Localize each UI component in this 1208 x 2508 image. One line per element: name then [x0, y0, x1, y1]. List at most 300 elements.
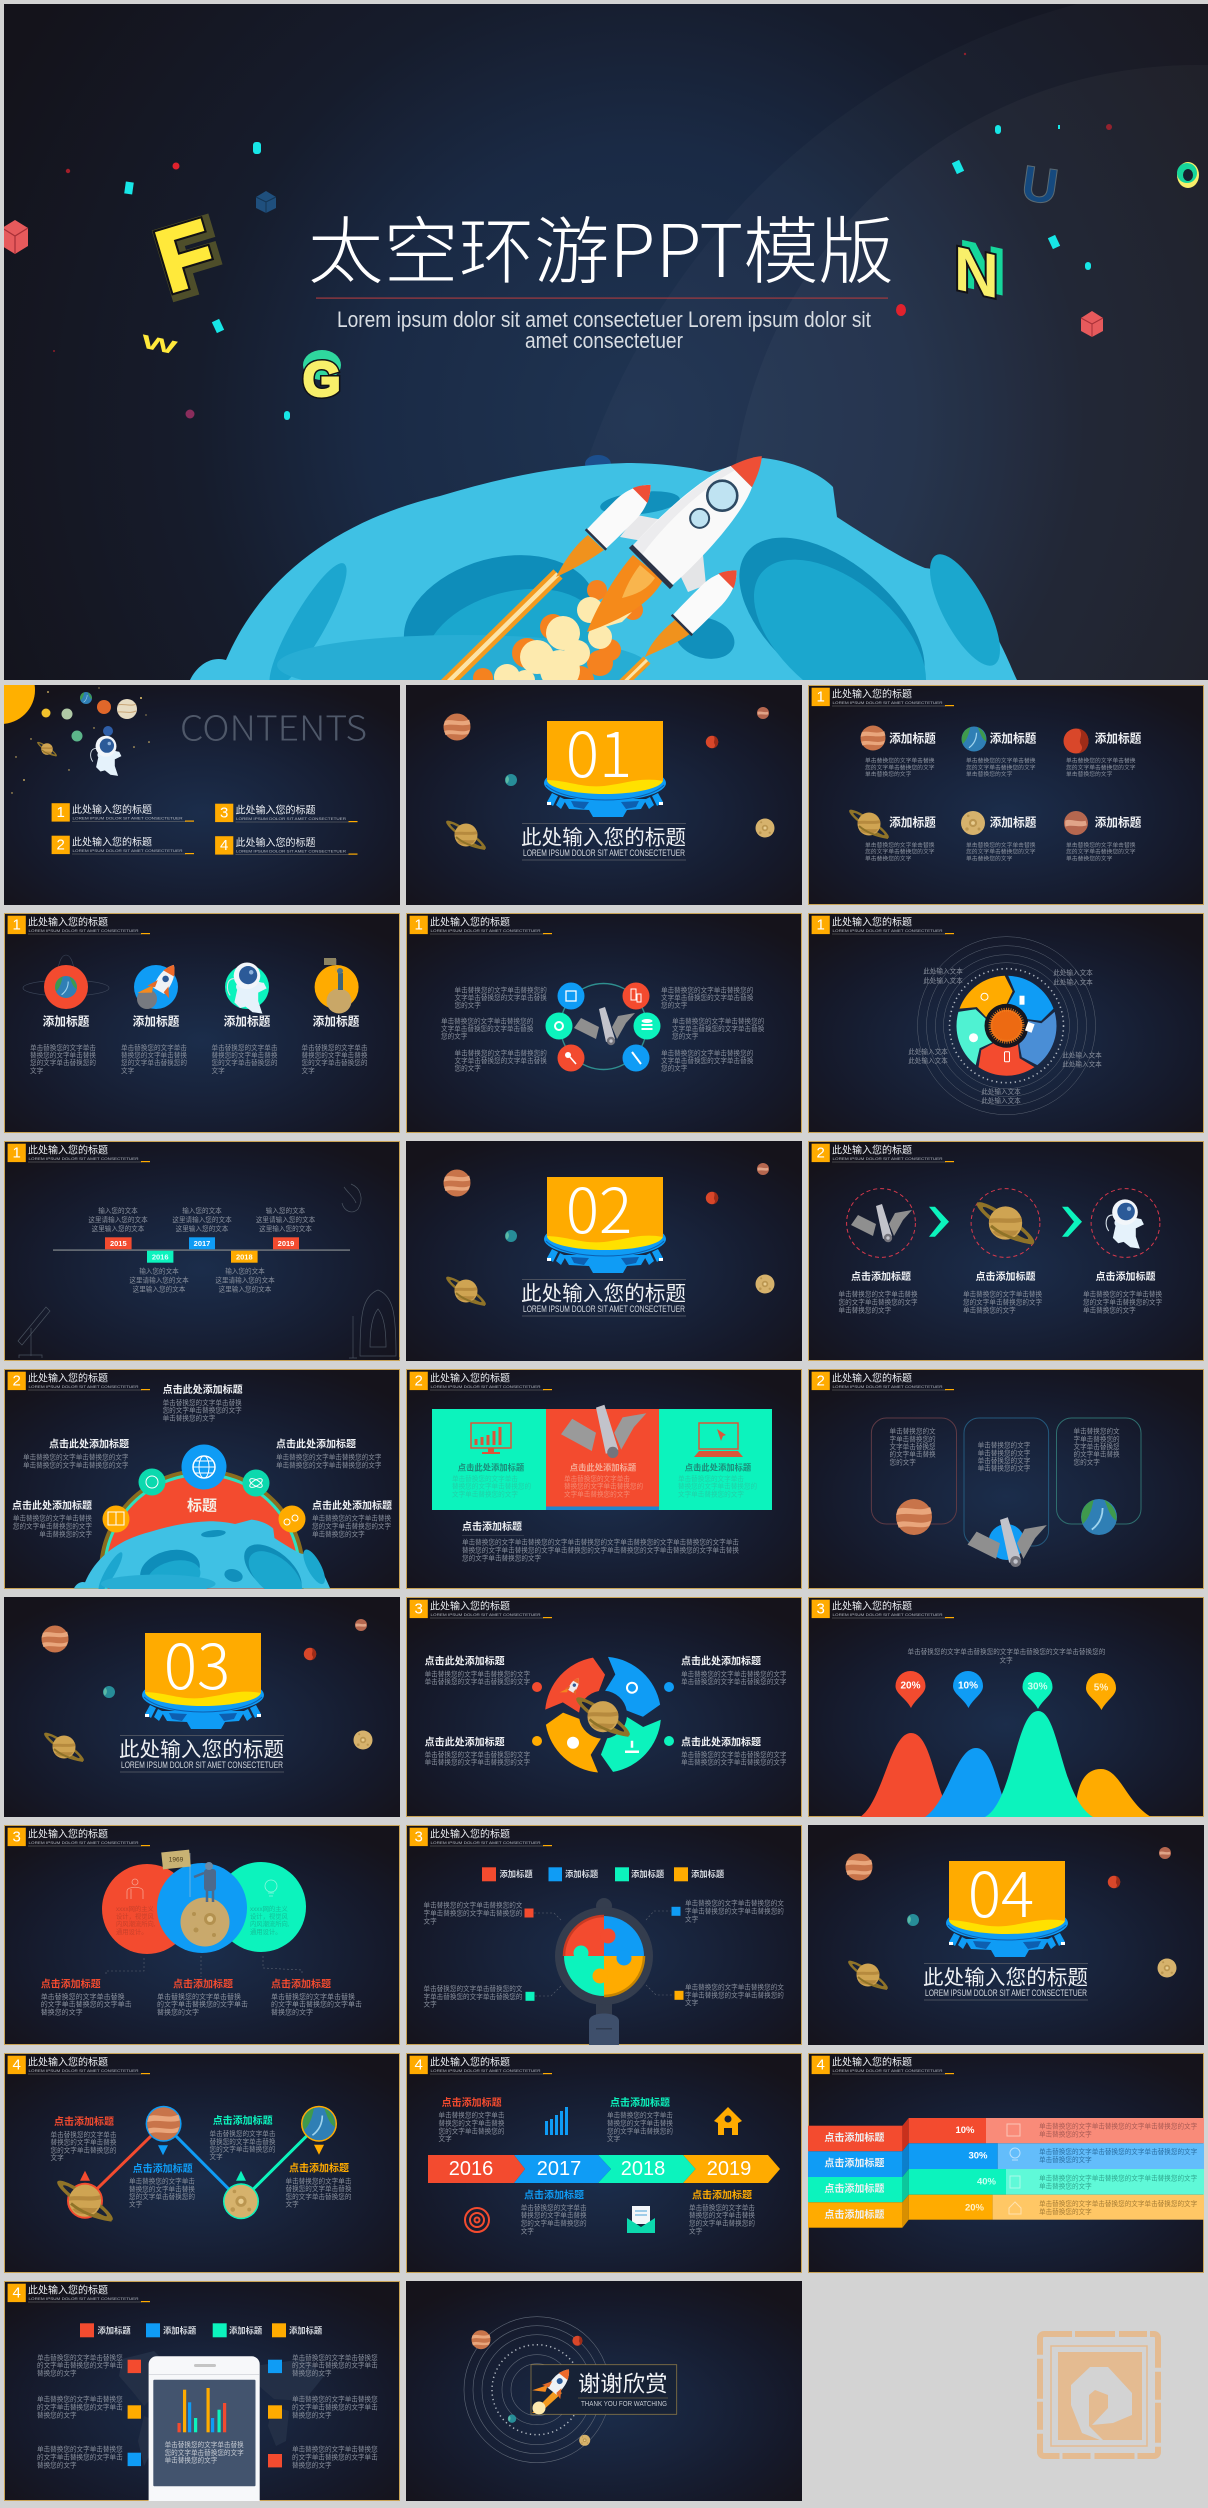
circle titles — [43, 1014, 360, 1028]
phone: 单击替换您的文字单击替换 — [165, 2440, 244, 2448]
venn circles: 通用设计。 — [116, 1926, 147, 1936]
panel: year arrows — [406, 2054, 802, 2272]
timeline bar with years — [53, 1237, 350, 1263]
header: 此处输入您的标题 — [832, 916, 912, 928]
contents item 3: LOREM IPSUM DOLOR SIT AMET CONSECTETUER — [236, 817, 346, 821]
header: LOREM IPSUM DOLOR SIT AMET CONSECTETUER — [430, 1841, 541, 1845]
header — [8, 1372, 150, 1390]
icon: letter F: F — [150, 204, 229, 313]
planet descriptions: 单击替换您的文字 — [966, 770, 1013, 778]
venn circles: 设计，视觉风 — [250, 1911, 288, 1920]
planet titles — [889, 732, 1142, 830]
venn circles: 通用设计。 — [250, 1926, 281, 1936]
icon: letter U: U — [1018, 155, 1062, 215]
text lower left: 单击替换您的文字单击替换 — [13, 1513, 92, 1522]
bottom text block: 替换您的文字单击替换您的文字单击替换您的文字单击替换您的文字单击替换您的文字单击替换 — [462, 1545, 739, 1554]
card: chart: 点击此处添加标题 — [458, 1463, 525, 1473]
text lower left: 点击此处添加标题 — [12, 1499, 92, 1512]
tab 2: 单击替换您的文字 — [978, 1440, 1031, 1449]
contents item 1: 1 — [57, 804, 65, 821]
panel: contents slide — [4, 685, 400, 905]
text column 1: 替换您的文字 — [41, 2007, 83, 2016]
legend: 添加标题 — [631, 1869, 665, 1879]
timeline text above: 这里输入您的文本 — [176, 1224, 229, 1232]
contents item 3: 3 — [220, 804, 228, 822]
tab 1 — [871, 1418, 956, 1535]
planet titles: 添加标题 — [990, 732, 1037, 746]
text column 2: 的文字单击替换您的文字单击 — [157, 1999, 248, 2008]
chart intro text: 单击替换您的文字单击替换您的文字单击替换您的文字单击替换您的 — [908, 1646, 1106, 1656]
header: 4 — [817, 2056, 825, 2074]
circle descriptions: 单击替换您的文字单击 — [212, 1042, 278, 1052]
header: 1 — [817, 688, 825, 706]
hub diagram — [546, 982, 660, 1072]
arrow band with years: 2019 — [707, 2158, 751, 2180]
icon: letter F: F — [146, 202, 225, 311]
text lower left: 单击替换您的文字 — [39, 1529, 92, 1538]
section heading: LOREM IPSUM DOLOR SIT AMET CONSECTETUER — [121, 1760, 283, 1770]
header — [410, 1372, 552, 1390]
tab 1: 您的文字 — [890, 1457, 916, 1466]
card: satellite: 替换您的文字单击替换您的 — [564, 1481, 644, 1490]
text column 3: 点击添加标题 — [271, 1978, 331, 1990]
note teal — [210, 2114, 276, 2160]
phone: 您的文字单击替换您的文字 — [165, 2448, 244, 2456]
text top: 单击替换您的文字单击替换 — [163, 1398, 242, 1406]
planet descriptions: 单击替换您的文字单击替换 — [865, 841, 935, 849]
note red: 替换您的文字单击替换 — [438, 2118, 505, 2127]
hub text right: 文字单击替换您的文字单击替换 — [672, 1024, 765, 1032]
circle icon: astronaut — [225, 962, 269, 1014]
timeline text above: 这里请输入您的文本 — [256, 1214, 316, 1224]
text lower right — [681, 1736, 787, 1766]
icon: letter N — [956, 240, 1003, 300]
text upper left — [425, 1654, 531, 1686]
circle titles: 添加标题 — [224, 1014, 271, 1028]
icon: house — [714, 2107, 742, 2135]
header: LOREM IPSUM DOLOR SIT AMET CONSECTETUER — [430, 2069, 541, 2073]
header: 此处输入您的标题 — [28, 2056, 108, 2068]
timeline bar with years: 2016 — [152, 1252, 169, 1261]
step descriptions: 单击替换您的文字 — [963, 1305, 1016, 1314]
header: 3 — [817, 1600, 825, 1618]
illustration: sun — [4, 685, 35, 724]
arrow band with years — [428, 2155, 780, 2183]
watermark stamp — [1040, 2334, 1158, 2456]
tab 3 — [1056, 1418, 1141, 1535]
thank-you box: THANK YOU FOR WATCHING — [581, 2399, 667, 2408]
icon: letter G: G — [303, 354, 340, 406]
dashed circles with art — [847, 1189, 1160, 1257]
step descriptions: 单击替换您的文字单击替换 — [838, 1289, 918, 1298]
venn circles: xxxx网的主义 — [250, 1904, 288, 1912]
text upper right: 单击替换您的文字单击替换您的文字 — [681, 1676, 787, 1686]
left notes: 的文字单击替换您的文字单击 — [37, 2452, 123, 2461]
planet descriptions: 单击替换您的文字单击替换 — [966, 841, 1036, 849]
venn circles: 内风潮流所向, — [250, 1918, 290, 1928]
bar 10%: 10% — [955, 2125, 975, 2136]
panel: orbit wheel — [808, 914, 1204, 1132]
left tabs: 点击添加标题 — [824, 2208, 884, 2221]
circle descriptions: 文字 — [30, 1066, 44, 1074]
tab 3: 您的文字 — [1074, 1457, 1100, 1466]
panel: six planets — [808, 686, 1204, 904]
note blue: 点击添加标题 — [524, 2188, 584, 2202]
contents item 2 — [52, 836, 194, 854]
text upper right: 点击此处添加标题 — [276, 1438, 356, 1450]
left notes: 替换您的文字 — [37, 2410, 77, 2419]
note red — [50, 2115, 117, 2162]
panel: mountain chart — [808, 1598, 1204, 1817]
text column 3 — [271, 1978, 362, 2016]
icon: letter W: W — [139, 331, 179, 359]
note red: 点击添加标题 — [54, 2115, 114, 2128]
panel: timeline — [4, 1142, 404, 1360]
bar 40%: 单击替换您的文字单击替换您的文字单击替换您的文字 — [1039, 2173, 1198, 2182]
step titles — [851, 1270, 1156, 1283]
timeline text below: 这里输入您的文本 — [133, 1284, 186, 1293]
header: LOREM IPSUM DOLOR SIT AMET CONSECTETUER — [28, 929, 139, 933]
planet titles: 添加标题 — [1095, 732, 1142, 746]
header: LOREM IPSUM DOLOR SIT AMET CONSECTETUER — [28, 1157, 139, 1161]
note upper right: 单击替换您的文字单击替换您的文 — [685, 1898, 784, 1907]
header: 此处输入您的标题 — [430, 1600, 510, 1612]
card: chart: 文字单击替换您的文字 — [452, 1489, 518, 1498]
bar 10% — [909, 2118, 1204, 2143]
note blue — [521, 2188, 587, 2235]
header — [8, 1828, 150, 1846]
icon: letter F: F — [146, 202, 225, 311]
note red: 您的文字单击替换您的 — [438, 2126, 505, 2135]
circle descriptions: 文字 — [302, 1066, 315, 1074]
section artwork — [443, 1163, 774, 1309]
timeline bar with years: 2017 — [194, 1239, 210, 1248]
panel: rounded tabs with planets — [808, 1370, 1204, 1588]
header: 此处输入您的标题 — [28, 2284, 108, 2296]
section artwork — [443, 707, 774, 853]
bar 30%: 30% — [968, 2150, 988, 2162]
title: 太空环游PPT模版 — [308, 193, 894, 299]
header: 1 — [415, 916, 423, 934]
note teal: 点击添加标题 — [213, 2114, 273, 2127]
header: 此处输入您的标题 — [832, 1372, 912, 1384]
section number: 01 — [566, 705, 632, 795]
note orange: 替换您的文字单击替换 — [689, 2210, 755, 2219]
circle titles: 添加标题 — [133, 1014, 180, 1028]
panel: thank you slide — [406, 2281, 802, 2501]
bar 40% — [909, 2169, 1204, 2195]
right notes: 替换您的文字 — [292, 2368, 332, 2377]
text lower left: 单击替换您的文字单击替换您的文字 — [425, 1750, 531, 1758]
header: LOREM IPSUM DOLOR SIT AMET CONSECTETUER — [28, 2069, 139, 2073]
text lower left: 点击此处添加标题 — [425, 1736, 505, 1748]
timeline text below: 这里请输入您的文本 — [215, 1275, 275, 1284]
icon: red cube left — [2, 220, 28, 254]
panel: phone chart — [4, 2282, 400, 2501]
section heading — [521, 1280, 686, 1316]
note teal: 单击替换您的文字单击 — [607, 2110, 673, 2119]
note orange: 替换您的文字单击替换 — [286, 2184, 352, 2192]
hub text left: 文字单击替换您的文字单击替换 — [454, 1056, 547, 1064]
timeline text above: 这里输入您的文本 — [259, 1224, 312, 1232]
circle descriptions: 单击替换您的文字单击 — [302, 1042, 368, 1052]
bar 30%: 单击替换您的文字单击替换您的文字单击替换您的文字 — [1039, 2146, 1198, 2156]
pin 10%: 10% — [958, 1680, 978, 1692]
icon: red cube right — [1081, 311, 1103, 337]
legend: 添加标题 — [289, 2325, 323, 2335]
header: 此处输入您的标题 — [28, 916, 108, 928]
tab 1: 字单击替换您的 — [890, 1434, 936, 1443]
text upper left — [23, 1438, 129, 1469]
header: 此处输入您的标题 — [430, 1828, 510, 1840]
text lower right: 单击替换您的文字单击替换您的文字 — [681, 1750, 787, 1758]
circle titles: 添加标题 — [43, 1014, 90, 1028]
tab 2: 单击替换您的文字 — [978, 1456, 1031, 1464]
right notes: 替换您的文字 — [292, 2410, 332, 2419]
right notes: 替换您的文字 — [292, 2460, 332, 2469]
pin 20% — [896, 1671, 926, 1708]
tab 3: 的文字单击替换 — [1074, 1449, 1120, 1458]
note blue: 单击替换您的文字单击 — [129, 2176, 195, 2185]
orbit rings and planets — [464, 2317, 610, 2463]
header: 此处输入您的标题 — [28, 1372, 108, 1384]
hub text right: 文字单击替换您的文字单击替换 — [661, 1056, 754, 1064]
icon: letter N: N — [960, 229, 1005, 308]
header — [812, 1144, 954, 1162]
contents item 3 — [215, 804, 358, 822]
left notes: 替换您的文字 — [37, 2460, 77, 2469]
orbit labels — [908, 966, 1102, 1104]
planet titles: 添加标题 — [889, 816, 936, 830]
header: 3 — [415, 1828, 423, 1846]
hub text right: 文字单击替换您的文字单击替换 — [661, 992, 754, 1002]
legend — [80, 2323, 323, 2337]
planet descriptions: 您的文字单击替换您的文字 — [1066, 763, 1136, 771]
circle titles: 添加标题 — [313, 1014, 360, 1028]
pin 30%: 30% — [1027, 1682, 1048, 1692]
timeline bar with years: 2019 — [278, 1239, 294, 1248]
header — [410, 916, 552, 934]
circle icon: rocket — [134, 956, 185, 1009]
mountain chart — [860, 1711, 1151, 1817]
note teal — [607, 2096, 673, 2142]
section number: 04 — [968, 1845, 1034, 1935]
note teal: 替换您的文字单击替换 — [210, 2136, 276, 2146]
icon: envelope — [627, 2206, 655, 2233]
text upper right — [276, 1438, 382, 1469]
text column 3: 的文字单击替换您的文字单击 — [271, 1999, 362, 2008]
circle descriptions: 您的文字单击替换您的 — [212, 1058, 278, 1066]
section heading: LOREM IPSUM DOLOR SIT AMET CONSECTETUER — [523, 848, 685, 858]
header: 此处输入您的标题 — [832, 1600, 912, 1612]
left notes: 的文字单击替换您的文字单击 — [37, 2402, 123, 2411]
circle descriptions: 文字 — [121, 1066, 135, 1074]
section heading: LOREM IPSUM DOLOR SIT AMET CONSECTETUER — [925, 1988, 1087, 1998]
header: 此处输入您的标题 — [832, 688, 912, 700]
section heading: 此处输入您的标题 — [119, 1738, 284, 1762]
timeline text above: 输入您的文本 — [98, 1206, 138, 1214]
note orange: 单击替换您的文字单击 — [689, 2202, 755, 2212]
timeline text below: 输入您的文本 — [139, 1266, 179, 1275]
pin 30% — [1022, 1672, 1052, 1709]
header: LOREM IPSUM DOLOR SIT AMET CONSECTETUER — [430, 1385, 541, 1389]
text upper right: 单击替换您的文字单击替换您的文字 — [681, 1669, 787, 1678]
note orange: 点击添加标题 — [289, 2162, 349, 2174]
panel: section 01 — [406, 685, 802, 905]
text lower right: 单击替换您的文字 — [312, 1529, 365, 1538]
panel: section 02 — [406, 1141, 802, 1361]
note blue: 替换您的文字单击替换 — [521, 2210, 587, 2219]
card: chart: 单击替换您的文字单击 — [452, 1474, 518, 1482]
header: 3 — [415, 1600, 423, 1618]
planet titles: 添加标题 — [1095, 816, 1142, 830]
hub text left: 单击替换您的文字单击替换您的 — [441, 1016, 534, 1025]
note orange — [689, 2188, 755, 2235]
section heading: 此处输入您的标题 — [521, 826, 686, 850]
text upper right — [681, 1654, 787, 1686]
pin 5% — [1086, 1673, 1116, 1710]
note teal: 文字 — [210, 2152, 223, 2160]
step descriptions: 单击替换您的文字 — [1083, 1305, 1136, 1314]
orbit labels: 此处输入文本 — [981, 1086, 1021, 1096]
planet descriptions: 您的文字单击替换您的文字 — [966, 763, 1036, 771]
section heading — [923, 1964, 1088, 2000]
note blue: 您的文字单击替换您的 — [521, 2218, 587, 2227]
contents item 1: 此处输入您的标题 — [72, 803, 152, 816]
panel: section 03 — [4, 1597, 400, 1817]
planet descriptions: 单击替换您的文字 — [865, 854, 912, 862]
text upper left: 单击替换您的文字单击替换您的文字 — [425, 1676, 531, 1686]
section heading — [119, 1736, 284, 1772]
note orange: 您的文字单击替换您的 — [689, 2218, 755, 2227]
header: LOREM IPSUM DOLOR SIT AMET CONSECTETUER — [28, 1385, 139, 1389]
bar 10%: 单击替换您的文字单击替换您的文字单击替换您的文字 — [1039, 2121, 1198, 2130]
card: satellite: 点击此处添加标题 — [570, 1463, 637, 1473]
header: 此处输入您的标题 — [430, 916, 510, 928]
text lower right: 您的文字单击替换您的文字 — [312, 1521, 392, 1530]
panel: venn circles — [4, 1826, 400, 2044]
panel: puzzle magnifier — [406, 1826, 802, 2045]
timeline text above: 这里请输入您的文本 — [172, 1214, 232, 1224]
bar 10%: 单击替换您的文字 — [1039, 2129, 1092, 2138]
header — [812, 2056, 954, 2074]
left notes: 单击替换您的文字单击替换您 — [37, 2394, 123, 2403]
left notes: 单击替换您的文字单击替换您 — [37, 2352, 123, 2362]
planet descriptions: 您的文字单击替换您的文字 — [1066, 848, 1136, 856]
note red: 文字 — [438, 2134, 452, 2142]
text column 1: 单击替换您的文字单击替换 — [41, 1992, 125, 2000]
contents item 2: 2 — [57, 836, 65, 854]
note blue: 单击替换您的文字单击 — [521, 2202, 587, 2212]
text upper left: 单击替换您的文字单击替换您的文字 — [23, 1460, 129, 1469]
note lower right — [674, 1982, 784, 2006]
text column 1: 点击添加标题 — [41, 1978, 101, 1990]
hub text right: 您的文字 — [672, 1031, 699, 1040]
circle descriptions: 文字 — [212, 1066, 225, 1074]
orbit labels: 此处输入文本 — [923, 976, 963, 984]
card: satellite: 文字单击替换您的文字 — [564, 1489, 630, 1498]
note blue: 文字 — [521, 2226, 534, 2235]
icon: letter N: N — [954, 233, 999, 312]
subtitle: Lorem ipsum dolor sit amet consectetuer Lorem ipsum dolor sit — [337, 306, 871, 332]
text column 1: 的文字单击替换您的文字单击 — [41, 1999, 132, 2008]
colour dots — [532, 1682, 674, 1746]
tab 1: 单击替换您的文 — [890, 1426, 936, 1435]
text upper left: 单击替换您的文字单击替换您的文字 — [425, 1669, 531, 1678]
note blue: 文字 — [129, 2199, 143, 2208]
panel: section 04 — [808, 1825, 1204, 2045]
timeline bar with years: 2015 — [110, 1239, 127, 1248]
header: 3 — [13, 1828, 21, 1846]
text column 3: 替换您的文字 — [271, 2007, 313, 2016]
header — [812, 1600, 954, 1618]
heading: contents: CONTENTS — [180, 702, 367, 750]
right notes: 的文字单击替换您的文字单击 — [292, 2360, 378, 2369]
header: 4 — [13, 2056, 21, 2074]
hub text right: 您的文字 — [661, 1063, 688, 1072]
header: 此处输入您的标题 — [430, 1372, 510, 1384]
legend: 添加标题 — [163, 2325, 197, 2335]
orbit labels: 此处输入文本 — [1062, 1059, 1102, 1068]
hub text left: 文字单击替换您的文字单击替换 — [441, 1024, 534, 1032]
card: laptop — [659, 1409, 772, 1510]
note teal: 您的文字单击替换您的 — [607, 2126, 673, 2135]
section artwork — [845, 1847, 1176, 1993]
hub text left: 文字单击替换您的文字单击替换 — [454, 992, 547, 1002]
orbit labels: 此处输入文本 — [923, 966, 963, 975]
contents item 2: 此处输入您的标题 — [72, 836, 152, 848]
astronaut with flag: 1969 — [169, 1856, 184, 1864]
connectors — [534, 1911, 674, 1996]
venn circles: 设计，视觉风 — [116, 1911, 154, 1920]
header: 4 — [415, 2056, 423, 2074]
text upper left: 点击此处添加标题 — [425, 1654, 505, 1668]
title rule — [316, 298, 888, 299]
note upper right — [672, 1898, 784, 1923]
panel: folded percentage bars — [808, 2054, 1204, 2272]
circle descriptions: 单击替换您的文字单击 — [121, 1042, 187, 1052]
header: 2 — [817, 1144, 825, 1162]
circle icon: flag on moon — [315, 958, 359, 1014]
header: 此处输入您的标题 — [832, 1144, 912, 1156]
panel: three steps — [808, 1142, 1204, 1360]
timeline text above: 输入您的文本 — [266, 1206, 306, 1214]
header: 1 — [817, 916, 825, 934]
orbit labels: 此处输入文本 — [908, 1046, 948, 1056]
hub text right: 单击替换您的文字单击替换您的 — [661, 985, 754, 994]
bottom text block: 点击添加标题 — [462, 1520, 522, 1533]
phone — [149, 2356, 260, 2501]
hub text right: 单击替换您的文字单击替换您的 — [672, 1016, 765, 1025]
header — [410, 1600, 552, 1618]
header: 4 — [13, 2284, 21, 2302]
right notes: 单击替换您的文字单击替换您 — [292, 2444, 378, 2453]
panel: four arrows with saturn — [406, 1598, 802, 1816]
arrow ring diagram — [536, 1647, 670, 1782]
legend — [482, 1867, 725, 1881]
hub text left: 单击替换您的文字单击替换您的 — [454, 1048, 547, 1057]
panel: three colour cards — [406, 1370, 802, 1588]
magnifier with puzzle — [555, 1898, 653, 2045]
planet descriptions: 单击替换您的文字单击替换 — [966, 757, 1036, 765]
panel: satellite hub — [406, 914, 802, 1132]
hero cover slide — [4, 4, 1208, 680]
text lower right: 点击此处添加标题 — [681, 1736, 761, 1748]
text column 3: 单击替换您的文字单击替换 — [271, 1992, 355, 2000]
card: satellite — [546, 1405, 659, 1510]
tab 1: 文字单击替换您 — [890, 1442, 936, 1450]
hub text left: 您的文字 — [441, 1031, 468, 1040]
